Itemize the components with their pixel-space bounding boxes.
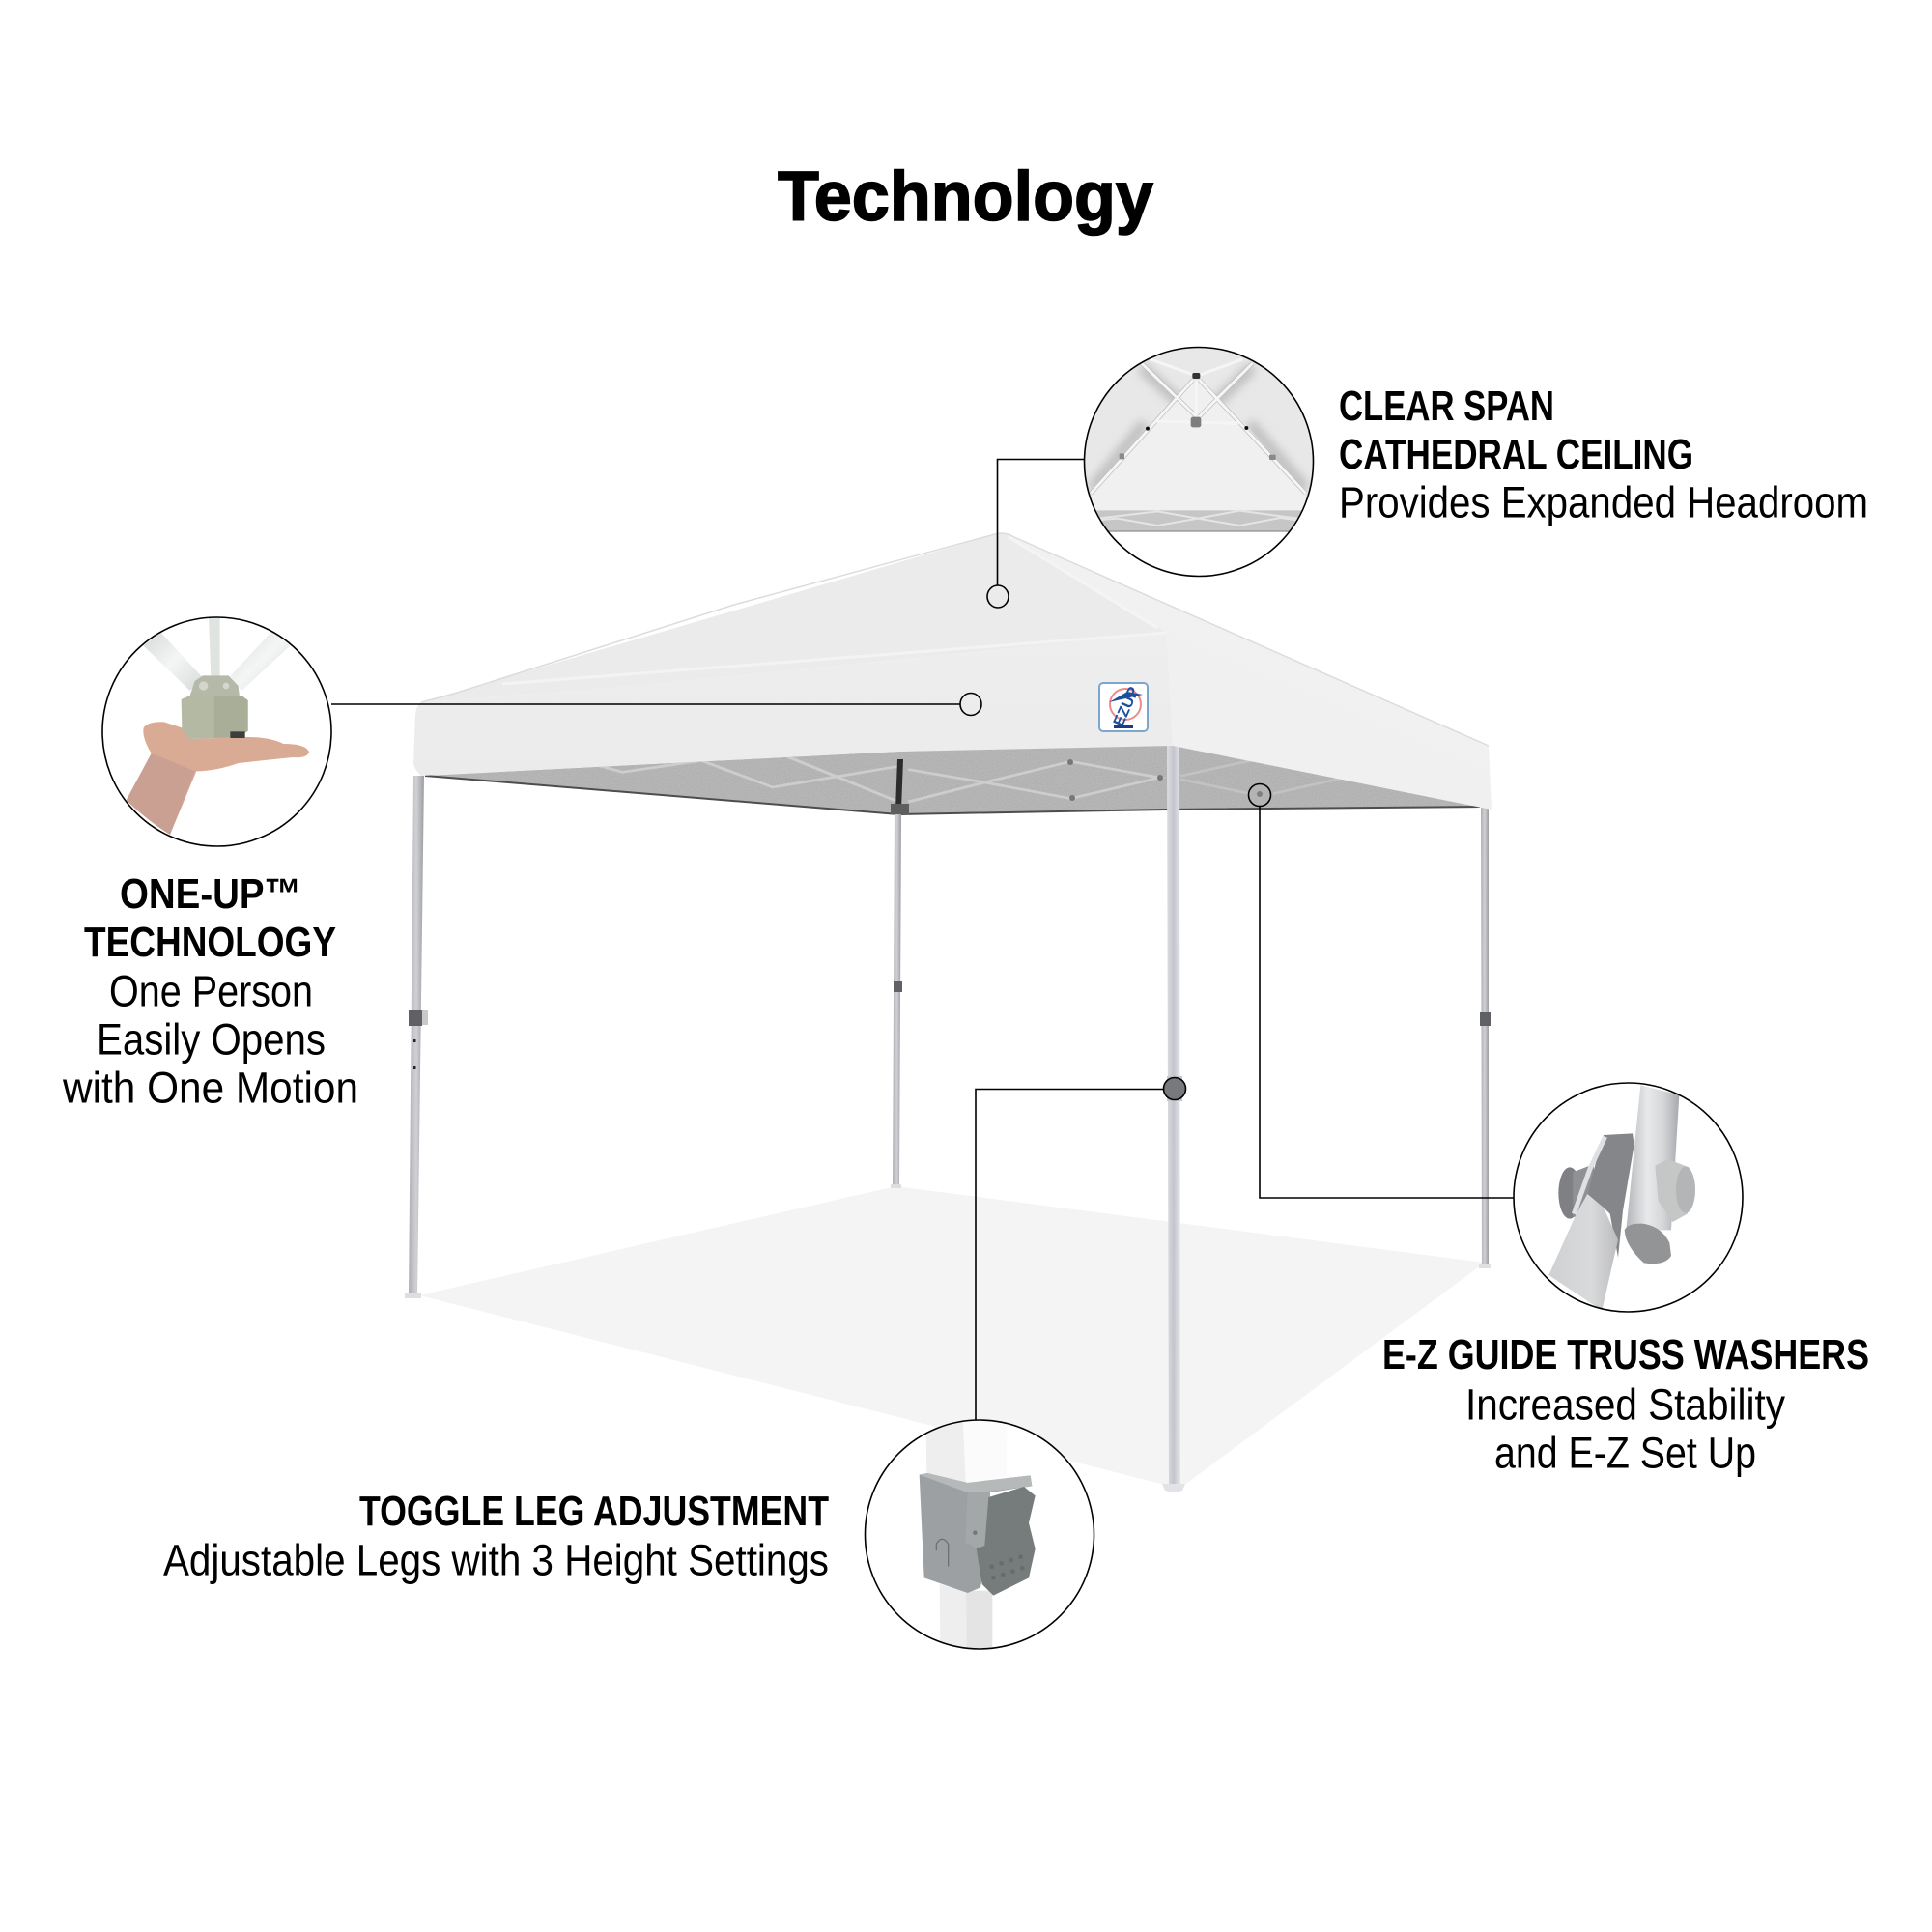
tent logo badge [1099,683,1148,731]
canopy tent [405,533,1492,1492]
underside of canopy [425,746,1480,815]
tent legs [405,746,1491,1492]
infographic canvas [63,168,1868,1650]
heading: TOGGLE LEG ADJUSTMENT [359,1488,829,1535]
detail circle: cathedral ceiling [1082,341,1314,580]
detail circle: one-up hub on hand [102,616,331,846]
description: Easily Opens [97,1014,326,1065]
floor shadow [419,1186,1485,1489]
heading [84,870,336,966]
description [1465,1379,1785,1478]
description: Provides Expanded Headroom [1339,477,1868,527]
text block: toggle leg adjustment [163,1488,829,1584]
description [62,966,358,1113]
description: Adjustable Legs with 3 Height Settings [163,1536,829,1584]
text block: clear span [1339,383,1868,527]
detail circle: truss washer [1514,1083,1743,1312]
description: One Person [109,966,313,1016]
leader: toggle [976,1078,1186,1420]
description: with One Motion [62,1063,358,1113]
heading: CLEAR SPAN [1339,383,1554,430]
front leg [1162,746,1185,1492]
description: and E-Z Set Up [1494,1428,1756,1478]
right leg [1479,808,1491,1268]
heading [1339,383,1693,478]
leader: clear span [987,460,1085,608]
canopy roof and valance [413,533,1492,810]
back leg [891,814,902,1188]
heading: ONE-UP™ [120,870,301,918]
detail circle: toggle leg clamp [866,1417,1094,1652]
leader: one-up [331,694,981,715]
leader: truss washers [1248,784,1514,1198]
heading: TECHNOLOGY [84,919,336,966]
left leg [405,776,428,1298]
callout leader lines and markers [331,460,1514,1420]
description: Increased Stability [1465,1379,1785,1430]
text block: truss washers [1382,1331,1869,1478]
text block: one-up technology [62,870,358,1113]
tent logo badge: EZUP [1111,684,1143,729]
heading: CATHEDRAL CEILING [1339,431,1693,478]
title: Technology [778,158,1153,236]
